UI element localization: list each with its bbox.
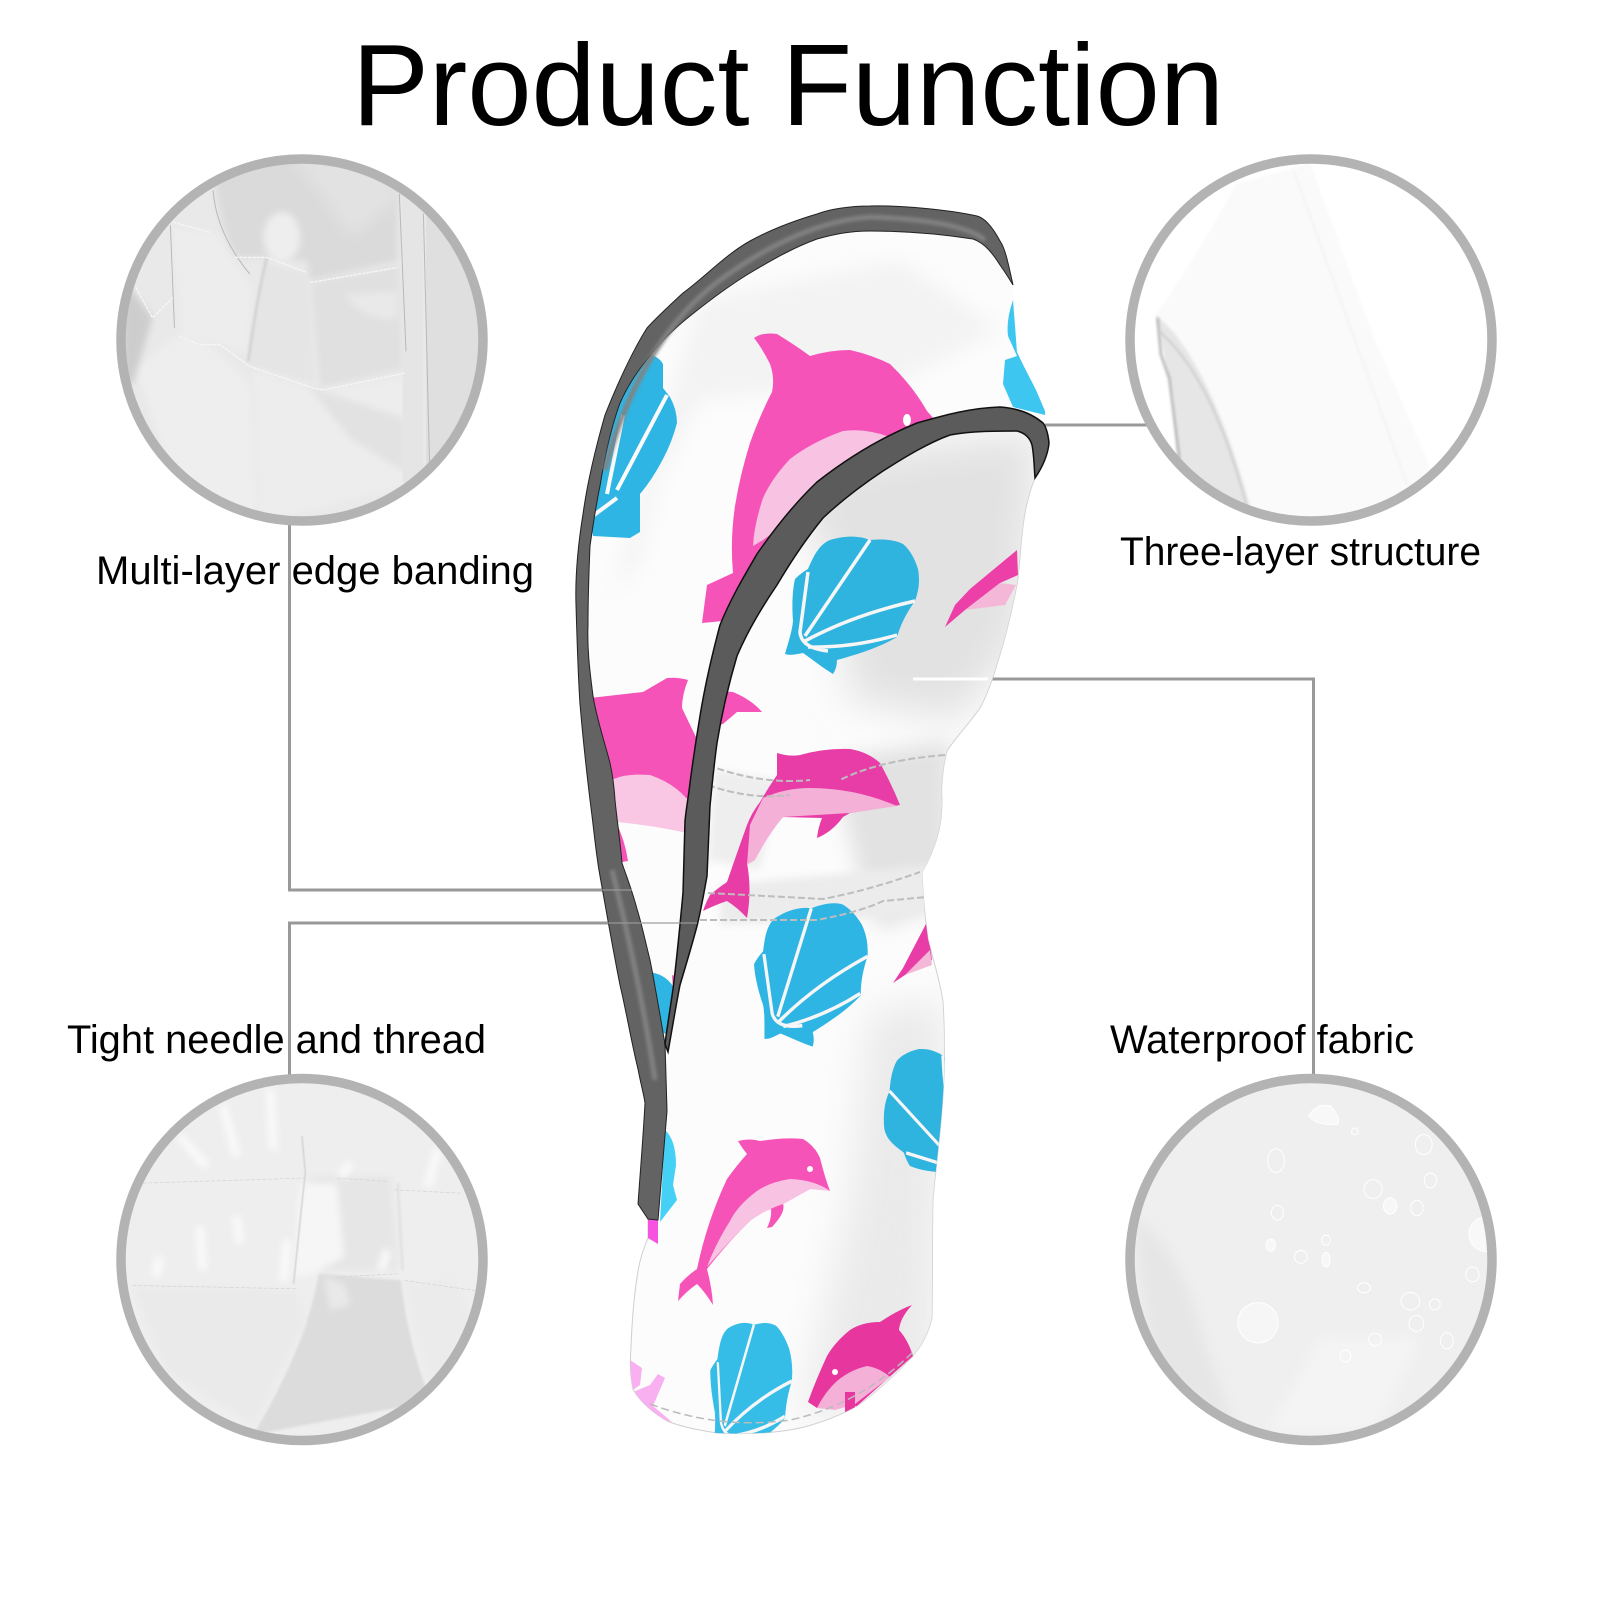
dolphin: small right gather [893, 922, 932, 983]
panel: three-layer structure detail circle [1130, 159, 1492, 523]
shell pieces: top right [1003, 300, 1045, 415]
dolphin: gathered middle [703, 749, 900, 918]
dolphin: low left behind strap [672, 975, 674, 986]
water droplet: edge [1468, 1217, 1487, 1252]
gather stitching [700, 755, 945, 920]
pink tip below strap [648, 1220, 658, 1244]
grey fabric shading: front [708, 430, 1040, 1420]
shell: low left behind strap [652, 972, 673, 1034]
label: three-layer structure: Three-layer structure [1120, 530, 1481, 574]
shell: bottom [710, 1322, 792, 1434]
dolphin: large top [702, 334, 955, 623]
dolphin: top right edge [945, 550, 1018, 627]
panel: waterproof fabric detail circle [1119, 1069, 1504, 1452]
connector: multi-layer edge banding [290, 520, 610, 890]
dolphin: bottom right [808, 1305, 913, 1412]
label: multi-layer edge banding: Multi-layer edge banding [96, 549, 534, 593]
back panel base [576, 206, 1045, 1220]
back panel print [592, 275, 1045, 1034]
title: Product Function [352, 20, 1224, 150]
dolphin: leaping lower [678, 1138, 830, 1305]
product: golf club head cover [576, 206, 1049, 1465]
dolphin: middle left [590, 678, 700, 862]
water droplets: small [1266, 1105, 1479, 1362]
connector lines [290, 425, 1314, 1078]
back edge binding strap [576, 206, 1013, 1220]
panel: multi-layer edge banding detail circle [109, 150, 492, 533]
shell: front upper [785, 537, 919, 674]
dolphin: faded bottom left [630, 1360, 672, 1422]
front panel base [630, 407, 1049, 1434]
connector: waterproof fabric [970, 679, 1314, 1078]
front edge binding strap [665, 407, 1049, 1052]
connector: tight needle and thread [290, 923, 610, 1078]
connector: white segment on fabric [913, 678, 988, 680]
front panel print [630, 430, 1040, 1465]
shell: top left [590, 354, 677, 538]
shell: strap edge [660, 1130, 677, 1222]
back strap highlight [605, 217, 985, 1080]
label: waterproof fabric: Waterproof fabric [1110, 1018, 1414, 1062]
shell: gather [754, 903, 868, 1047]
grey fabric shading: back [688, 275, 970, 394]
dolphin: front behind strap fin [721, 692, 762, 724]
connector: three-layer structure [1040, 424, 1150, 426]
connector overlay on strap [600, 890, 697, 923]
label: tight needle and thread: Tight needle and thread [67, 1018, 486, 1062]
panel: tight needle and thread detail circle [109, 1069, 492, 1452]
bottom hem stitching [650, 1350, 915, 1423]
shell: right [884, 1049, 944, 1172]
water droplet: large [1238, 1303, 1278, 1343]
